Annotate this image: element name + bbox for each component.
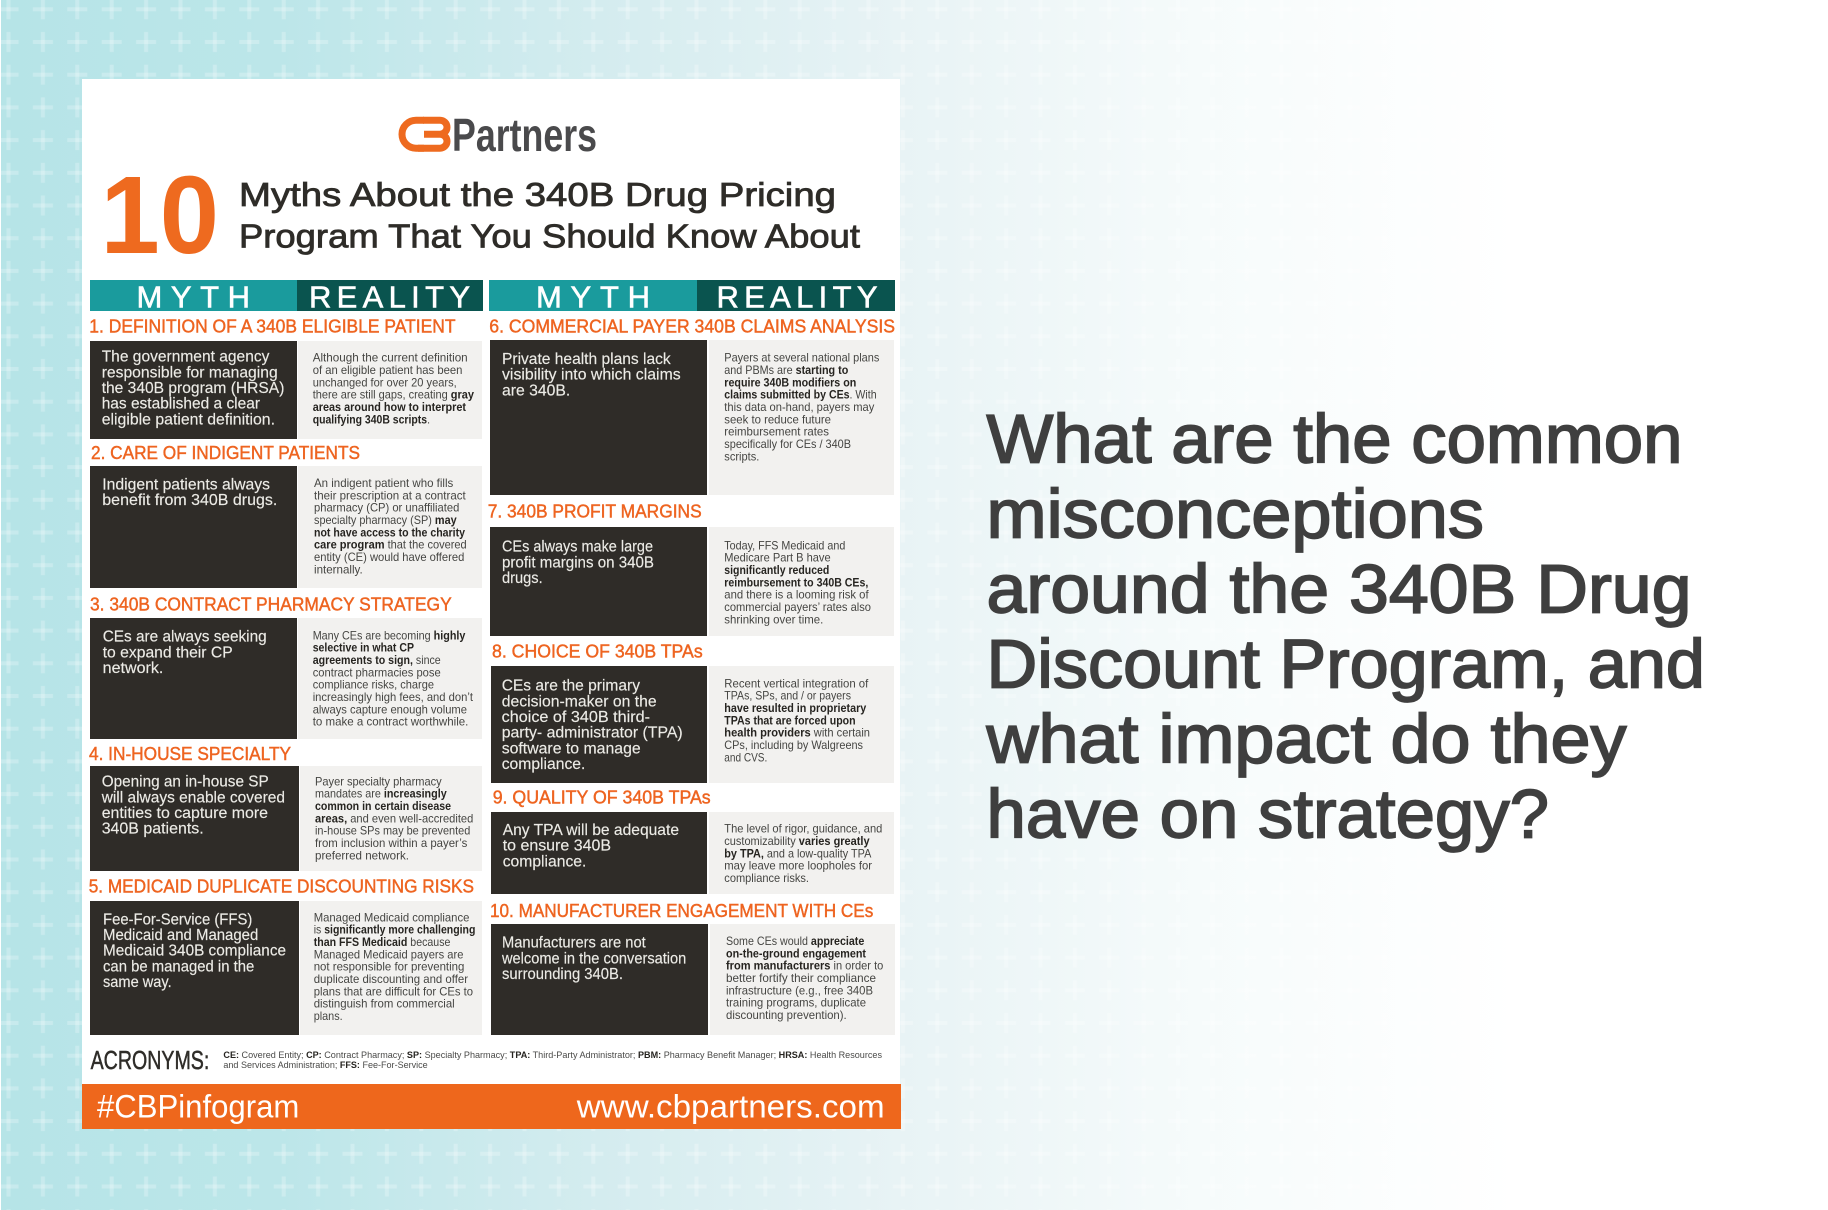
myth text box 1: eligible patient definition. bbox=[102, 411, 275, 428]
myth text box 3: to expand their CP bbox=[103, 644, 233, 661]
reality text box 2 bbox=[298, 466, 482, 588]
myth text box 10: welcome in the conversation bbox=[501, 950, 686, 967]
panel: myth 10 bbox=[490, 900, 895, 1035]
myth text box 9: compliance. bbox=[503, 853, 586, 870]
column header: right myth / reality: MYTH bbox=[536, 279, 650, 314]
heading: myth 10: 10. MANUFACTURER ENGAGEMENT WITH CEs bbox=[490, 900, 873, 921]
reality text box 4: Payer specialty pharmacy bbox=[315, 774, 442, 788]
myth text box 8: software to manage bbox=[502, 740, 641, 757]
myth text box 6: are 340B. bbox=[502, 382, 570, 399]
reality text box 7: shrinking over time. bbox=[724, 612, 823, 626]
myth text box 4: 340B patients. bbox=[102, 821, 204, 838]
title: Myths About the 340B Drug Pricing bbox=[239, 176, 836, 213]
reality text box 8: have resulted in proprietary bbox=[724, 701, 867, 715]
acronyms legend: and Services Administration; FFS: Fee-For-Service bbox=[223, 1059, 428, 1070]
myth text box 8: CEs are the primary bbox=[502, 678, 640, 695]
reality text box 8: CPs, including by Walgreens bbox=[724, 738, 863, 752]
reality text box 3: Many CEs are becoming highly bbox=[313, 628, 466, 642]
reality text box 6: scripts. bbox=[724, 449, 759, 463]
reality text box 4: areas, and even well-accredited bbox=[315, 811, 473, 825]
reality text box 2: entity (CE) would have offered bbox=[314, 550, 464, 564]
reality text box 2: specialty pharmacy (SP) may bbox=[314, 513, 457, 527]
panel: myth 2 bbox=[90, 442, 482, 588]
myth text box 5: Fee-For-Service (FFS) bbox=[103, 911, 252, 928]
reality text box 10: better fortify their compliance bbox=[726, 971, 876, 985]
reality text box 2: care program that the covered bbox=[314, 538, 467, 552]
reality text box 2: internally. bbox=[314, 562, 363, 576]
reality text box 6: specifically for CEs / 340B bbox=[724, 437, 851, 451]
myth text box 5: Medicaid and Managed bbox=[103, 927, 258, 944]
reality text box 7: reimbursement to 340B CEs, bbox=[724, 575, 868, 589]
title: Program That You Should Know About bbox=[239, 218, 860, 255]
reality text box 10 bbox=[710, 924, 895, 1035]
myth text box 5 bbox=[90, 901, 299, 1035]
heading: myth 9: 9. QUALITY OF 340B TPAs bbox=[493, 786, 711, 807]
reality text box 4 bbox=[300, 766, 482, 871]
reality text box 5: than FFS Medicaid because bbox=[314, 935, 451, 949]
reality text box 1: qualifying 340B scripts. bbox=[313, 412, 430, 426]
big number 10: 10 bbox=[100, 154, 219, 277]
reality text box 4: common in certain disease bbox=[315, 799, 451, 813]
myth text box 3: CEs are always seeking bbox=[103, 629, 267, 646]
myth text box 7: profit margins on 340B bbox=[502, 554, 654, 571]
myth text box 7: CEs always make large bbox=[502, 539, 653, 556]
myth text box 8: choice of 340B third- bbox=[502, 709, 650, 726]
reality text box 8: TPAs, SPs, and / or payers bbox=[724, 689, 851, 703]
reality text box 5: Managed Medicaid payers are bbox=[314, 947, 464, 961]
myth text box 9 bbox=[491, 812, 707, 894]
reality text box 4: mandates are increasingly bbox=[315, 787, 447, 801]
reality text box 9: customizability varies greatly bbox=[724, 834, 870, 848]
title bbox=[239, 176, 860, 255]
reality text box 6: reimbursement rates bbox=[724, 425, 829, 439]
logo: CB Partners bbox=[402, 109, 597, 161]
reality text box 2: pharmacy (CP) or unaffiliated bbox=[314, 501, 459, 515]
acronyms legend: CE: Covered Entity; CP: Contract Pharmacy; SP: Specialty Pharmacy; TPA: Third-Party Administrator; PBM: Pharmacy Benefit Manager; HRSA: Health Resources bbox=[223, 1049, 882, 1060]
question text: Discount Program, and bbox=[986, 626, 1705, 703]
reality text box 6: Payers at several national plans bbox=[724, 351, 879, 365]
reality text box 5: plans. bbox=[314, 1009, 343, 1023]
reality text box 6: require 340B modifiers on bbox=[724, 375, 856, 389]
heading: myth 3: 3. 340B CONTRACT PHARMACY STRATEGY bbox=[90, 594, 452, 615]
panel: myth 6 bbox=[489, 316, 895, 495]
heading: myth 4: 4. IN-HOUSE SPECIALTY bbox=[89, 743, 291, 764]
reality text box 5: not responsible for preventing bbox=[314, 960, 464, 974]
reality text box 4: from inclusion within a payer’s bbox=[315, 836, 467, 850]
reality text box 6: this data on-hand, payers may bbox=[724, 400, 874, 414]
reality text box 1: of an eligible patient has been bbox=[313, 363, 462, 377]
myth text box 6: Private health plans lack bbox=[502, 351, 672, 368]
column header: right myth / reality: REALITY bbox=[716, 279, 878, 314]
myth text box 7: drugs. bbox=[502, 570, 543, 587]
reality text box 10: discounting prevention). bbox=[726, 1008, 847, 1022]
heading: myth 1: 1. DEFINITION OF A 340B ELIGIBLE PATIENT bbox=[89, 316, 456, 337]
reality text box 3: always capture enough volume bbox=[313, 702, 467, 716]
myth text box 6: visibility into which claims bbox=[502, 367, 681, 384]
myth text box 5: same way. bbox=[103, 974, 172, 991]
myth text box 3: network. bbox=[103, 660, 163, 677]
footer band bbox=[82, 1084, 901, 1129]
reality text box 5: is significantly more challenging bbox=[314, 923, 475, 937]
reality text box 1: Although the current definition bbox=[313, 351, 468, 365]
reality text box 8: and CVS. bbox=[724, 750, 767, 764]
myth text box 4 bbox=[90, 766, 299, 871]
reality text box 8: Recent vertical integration of bbox=[724, 676, 869, 690]
myth text box 8: compliance. bbox=[502, 756, 585, 773]
myth text box 9: to ensure 340B bbox=[503, 838, 611, 855]
reality text box 1: unchanged for over 20 years, bbox=[313, 375, 457, 389]
panel: myth 8 bbox=[491, 640, 894, 783]
reality text box 7: Medicare Part B have bbox=[724, 551, 831, 565]
panel: myth 1 bbox=[89, 316, 482, 439]
reality text box 7: and there is a looming risk of bbox=[724, 588, 869, 602]
reality text box 6: and PBMs are starting to bbox=[724, 363, 848, 377]
panel: myth 3 bbox=[90, 594, 482, 739]
reality text box 3: to make a contract worthwhile. bbox=[313, 715, 468, 729]
reality text box 7: commercial payers’ rates also bbox=[724, 600, 871, 614]
myth text box 9: Any TPA will be adequate bbox=[503, 822, 679, 839]
reality text box 3: compliance risks, charge bbox=[313, 678, 434, 692]
footer band: #CBPinfogram bbox=[97, 1088, 299, 1124]
reality text box 8 bbox=[709, 666, 894, 783]
reality text box 5: plans that are difficult for CEs to bbox=[314, 984, 473, 998]
question text: What are the common bbox=[986, 401, 1682, 478]
reality text box 8: health providers with certain bbox=[724, 726, 870, 740]
myth text box 10: Manufacturers are not bbox=[502, 935, 646, 952]
reality text box 5: duplicate discounting and offer bbox=[314, 972, 468, 986]
question text: misconceptions bbox=[986, 476, 1484, 553]
reality text box 3 bbox=[298, 618, 482, 739]
reality text box 10: Some CEs would appreciate bbox=[726, 934, 865, 948]
myth text box 5: Medicaid 340B compliance bbox=[103, 943, 286, 960]
reality text box 10: on-the-ground engagement bbox=[726, 946, 866, 960]
reality text box 3: increasingly high fees, and don’t bbox=[313, 690, 474, 704]
column header: left myth / reality bbox=[90, 279, 483, 314]
reality text box 3: agreements to sign, since bbox=[313, 653, 441, 667]
reality text box 1: areas around how to interpret bbox=[313, 400, 466, 414]
myth text box 1 bbox=[90, 341, 297, 439]
panel: myth 5 bbox=[89, 875, 482, 1035]
reality text box 7 bbox=[709, 527, 894, 636]
reality text box 9 bbox=[709, 812, 894, 894]
reality text box 6 bbox=[709, 340, 894, 495]
myth text box 5: can be managed in the bbox=[103, 958, 254, 975]
reality text box 3: contract pharmacies pose bbox=[313, 665, 441, 679]
myth text box 10: surrounding 340B. bbox=[502, 966, 623, 983]
myth text box 4: Opening an in-house SP bbox=[102, 774, 269, 791]
myth text box 1: responsible for managing bbox=[102, 364, 278, 381]
panel: myth 9 bbox=[491, 786, 894, 894]
reality text box 9: may leave more loopholes for bbox=[724, 859, 872, 873]
myth text box 7 bbox=[490, 527, 707, 636]
question text: have on strategy? bbox=[986, 776, 1549, 853]
reality text box 10: training programs, duplicate bbox=[726, 996, 866, 1010]
myth text box 8: decision-maker on the bbox=[502, 693, 657, 710]
reality text box 9: by TPA, and a low-quality TPA bbox=[724, 846, 871, 860]
logo: CB Partners: Partners bbox=[452, 109, 597, 161]
acronyms legend bbox=[91, 1045, 882, 1075]
heading: myth 7: 7. 340B PROFIT MARGINS bbox=[488, 501, 702, 522]
column header: right myth / reality bbox=[489, 279, 895, 314]
icon: CB monogram bbox=[402, 120, 447, 148]
reality text box 5: distinguish from commercial bbox=[314, 997, 455, 1011]
myth text box 4: will always enable covered bbox=[101, 789, 285, 806]
myth text box 10 bbox=[491, 924, 708, 1035]
myth text box 2: benefit from 340B drugs. bbox=[102, 492, 277, 509]
column header: left myth / reality: REALITY bbox=[309, 279, 470, 314]
reality text box 10: infrastructure (e.g., free 340B bbox=[726, 983, 873, 997]
reality text box 2: their prescription at a contract bbox=[314, 488, 466, 502]
reality text box 9: compliance risks. bbox=[724, 871, 809, 885]
reality text box 7: significantly reduced bbox=[724, 563, 829, 577]
reality text box 3: selective in what CP bbox=[313, 641, 414, 655]
reality text box 9: The level of rigor, guidance, and bbox=[724, 822, 882, 836]
myth text box 4: entities to capture more bbox=[102, 805, 268, 822]
reality text box 5: Managed Medicaid compliance bbox=[314, 910, 470, 924]
reality text box 8: TPAs that are forced upon bbox=[724, 713, 856, 727]
reality text box 6: seek to reduce future bbox=[724, 412, 831, 426]
myth text box 8: party- administrator (TPA) bbox=[502, 725, 683, 742]
heading: myth 6: 6. COMMERCIAL PAYER 340B CLAIMS ANALYSIS bbox=[489, 316, 895, 337]
myth text box 2 bbox=[90, 466, 297, 588]
heading: myth 5: 5. MEDICAID DUPLICATE DISCOUNTING RISKS bbox=[89, 875, 474, 896]
panel: infographic sheet bbox=[82, 79, 901, 1129]
reality text box 5 bbox=[300, 901, 482, 1035]
heading: myth 8: 8. CHOICE OF 340B TPAs bbox=[492, 640, 703, 661]
myth text box 6 bbox=[490, 340, 707, 495]
reality text box 1 bbox=[298, 341, 482, 439]
reality text box 2: not have access to the charity bbox=[314, 525, 465, 539]
question text: around the 340B Drug bbox=[986, 551, 1692, 628]
reality text box 4: preferred network. bbox=[315, 848, 409, 862]
question text bbox=[985, 401, 1705, 853]
reality text box 10: from manufacturers in order to bbox=[726, 959, 884, 973]
heading: myth 2: 2. CARE OF INDIGENT PATIENTS bbox=[91, 442, 360, 463]
footer band: www.cbpartners.com bbox=[576, 1088, 885, 1124]
panel: myth 4 bbox=[89, 743, 482, 871]
question text: what impact do they bbox=[985, 701, 1627, 778]
reality text box 7: Today, FFS Medicaid and bbox=[724, 538, 845, 552]
panel: myth 7 bbox=[488, 501, 894, 636]
column header: left myth / reality: MYTH bbox=[136, 279, 250, 314]
myth text box 8 bbox=[491, 666, 707, 783]
myth text box 1: the 340B program (HRSA) bbox=[102, 380, 284, 397]
myth text box 2: Indigent patients always bbox=[102, 476, 270, 493]
myth text box 1: The government agency bbox=[102, 349, 269, 366]
reality text box 6: claims submitted by CEs. With bbox=[724, 388, 877, 402]
reality text box 2: An indigent patient who fills bbox=[314, 476, 453, 490]
acronyms legend: ACRONYMS: bbox=[91, 1045, 209, 1075]
reality text box 1: there are still gaps, creating gray bbox=[313, 388, 474, 402]
myth text box 1: has established a clear bbox=[102, 396, 261, 413]
myth text box 3 bbox=[90, 618, 297, 739]
reality text box 4: in-house SPs may be prevented bbox=[315, 824, 470, 838]
